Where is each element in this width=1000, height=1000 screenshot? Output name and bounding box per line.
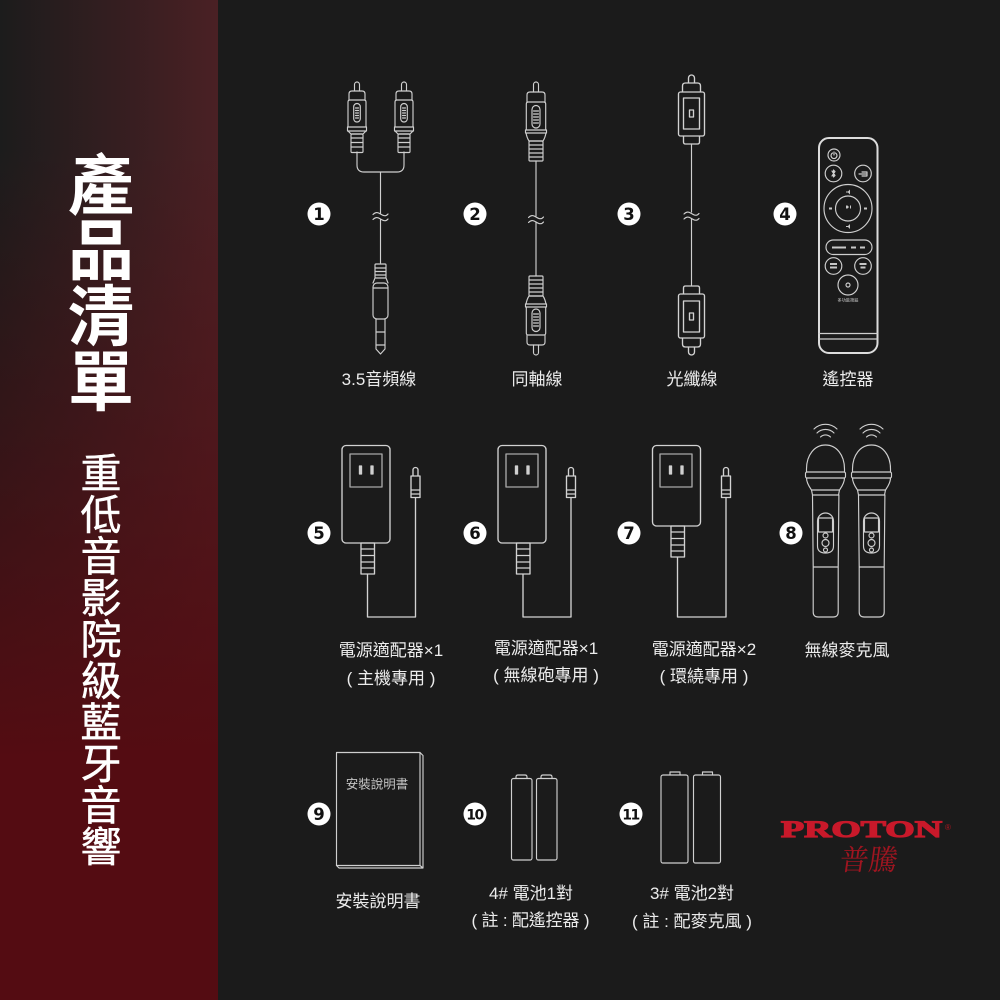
item 4: remote control: [819, 138, 878, 353]
label 7: 電源適配器×2: [652, 640, 756, 659]
badge 10: 10: [466, 808, 484, 824]
label 6: 電源適配器×1: [494, 639, 598, 658]
item 3: optical cable: [678, 75, 704, 355]
badge 9: [308, 802, 330, 826]
subtitle: 音: [80, 783, 122, 829]
label 8: 無線麥克風: [804, 641, 890, 660]
item 9: manual: 安裝說明書: [346, 776, 408, 792]
badge 4: [774, 202, 796, 226]
subtitle: 牙: [80, 742, 122, 788]
badge 5: 5: [313, 524, 325, 543]
subtitle: 響: [80, 824, 122, 870]
badge 7: [618, 522, 640, 544]
label 1: 3.5音頻線: [342, 370, 416, 389]
logo: PROTON: ®: [945, 823, 951, 832]
label 5: 電源適配器×1: [339, 641, 443, 660]
label 9: 安裝說明書: [336, 892, 420, 911]
item 4: remote control: 多功能按鈕: [838, 296, 859, 304]
label 4: 遙控器: [822, 370, 874, 389]
label 5: [339, 641, 443, 688]
badge 8: 8: [785, 524, 797, 543]
badge 11: 11: [622, 808, 639, 824]
subtitle: 級: [80, 658, 122, 704]
subtitle: 重: [80, 451, 122, 497]
badge 1: 1: [313, 205, 325, 224]
title: product list: 單: [68, 345, 134, 419]
subtitle: 低: [80, 492, 122, 538]
badge 3: [618, 202, 640, 226]
badge 6: [464, 522, 486, 544]
badge 3: 3: [623, 205, 635, 224]
badge 7: 7: [623, 524, 635, 543]
badge 1: [308, 202, 330, 226]
item 8: wireless microphones: [806, 424, 892, 617]
label 5: ( 主機專用 ): [347, 669, 435, 688]
subtitle: [80, 451, 122, 870]
subtitle: 院: [80, 617, 122, 663]
logo: PROTON: PROTON: [781, 817, 943, 842]
logo: PROTON: [781, 817, 951, 879]
badge 9: 9: [313, 805, 325, 824]
label 7: ( 環繞專用 ): [660, 667, 748, 686]
item 2: coaxial cable: [526, 82, 546, 355]
badge 10: [464, 802, 486, 826]
label 10: 4# 電池1對: [489, 884, 573, 903]
badge 11: [620, 802, 642, 826]
logo: PROTON: 普騰: [837, 837, 901, 879]
label 2: 同軸線: [512, 370, 562, 389]
badge 5: [308, 522, 330, 544]
item 6: power adapter: [498, 446, 576, 617]
subtitle: 音: [80, 534, 122, 580]
badge 2: 2: [469, 205, 481, 224]
badge 8: [780, 522, 802, 544]
title: product list: 品: [68, 214, 134, 288]
label 11: [632, 884, 752, 931]
label 11: ( 註 : 配麥克風 ): [632, 912, 752, 931]
item 7: power adapter: [652, 446, 730, 617]
label 7: [652, 640, 756, 686]
item 10: AAA batteries: [512, 775, 557, 860]
panel: red gradient sidebar: [0, 0, 218, 1000]
label 3: 光纖線: [666, 370, 718, 389]
label 11: 3# 電池2對: [650, 884, 734, 903]
subtitle: 藍: [80, 700, 122, 746]
item 1: 3.5 audio cable: [348, 82, 414, 354]
label 10: [472, 884, 590, 930]
item 11: AA batteries: [661, 772, 720, 863]
badge 6: 6: [469, 524, 481, 543]
badge 2: [464, 202, 486, 226]
item 9: manual: [336, 752, 423, 868]
title: product list: 產: [68, 149, 134, 223]
item 5: power adapter: [342, 446, 420, 617]
title: product list: 清: [68, 280, 134, 354]
subtitle: 影: [80, 576, 122, 622]
label 6: ( 無線砲專用 ): [493, 666, 599, 685]
label 6: [493, 639, 599, 685]
badge 4: 4: [779, 205, 791, 224]
title: product list: [68, 149, 134, 419]
label 10: ( 註 : 配遙控器 ): [472, 911, 590, 930]
